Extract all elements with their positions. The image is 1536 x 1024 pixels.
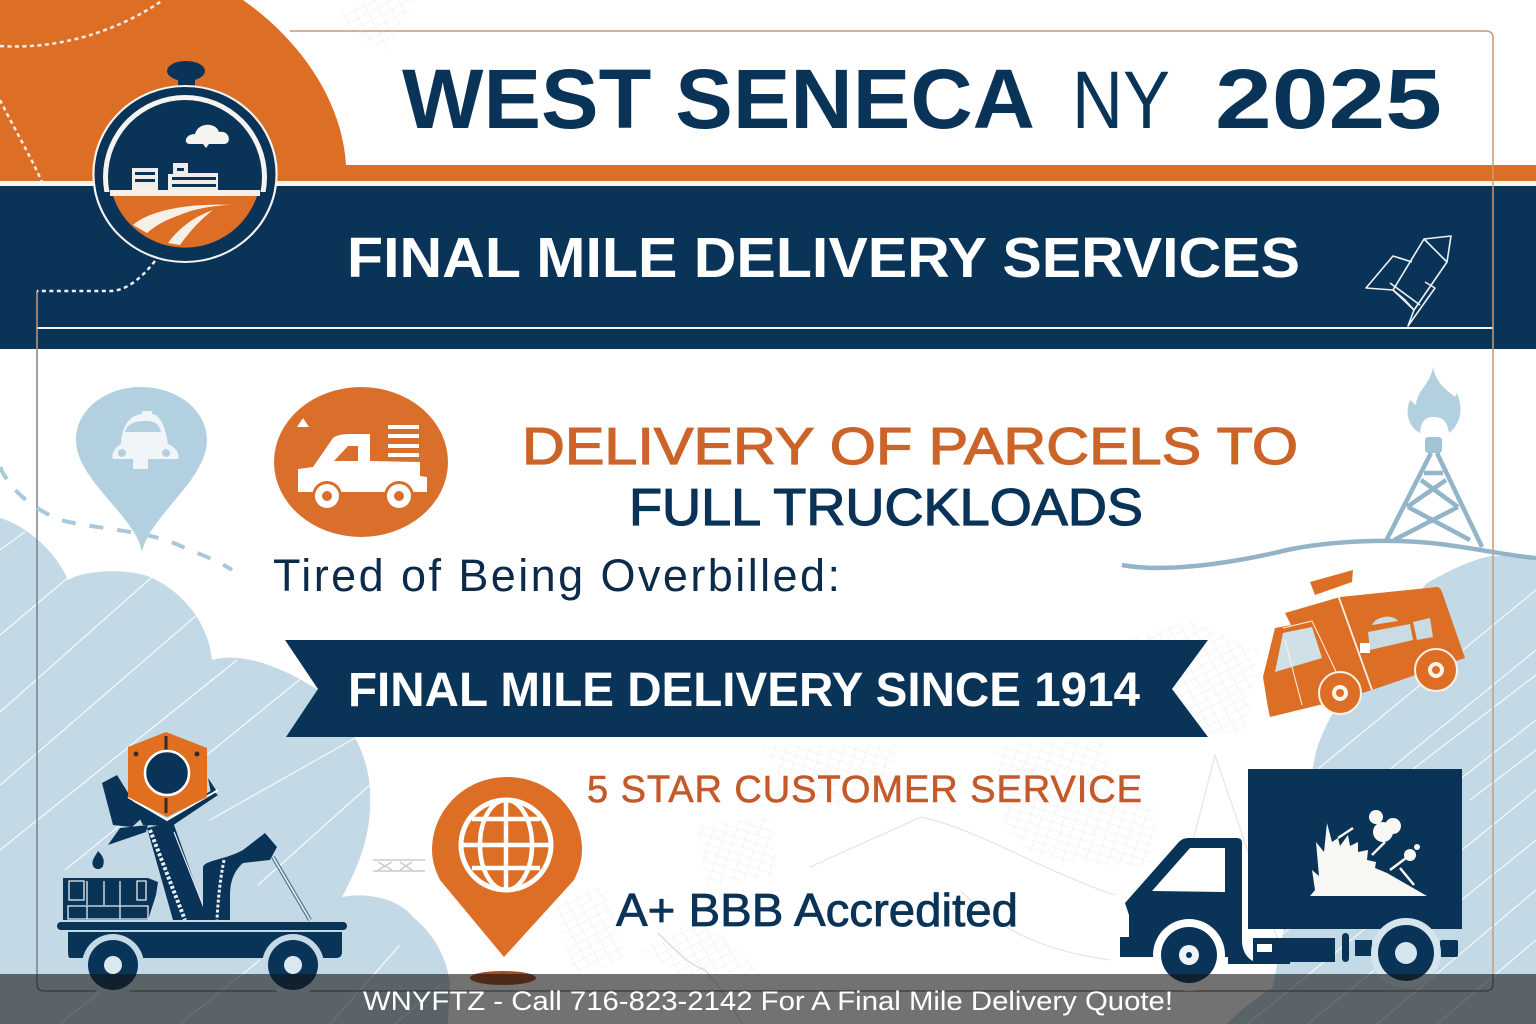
banner text: FINAL MILE DELIVERY SINCE 1914 <box>348 664 1140 717</box>
icon: orange food truck <box>1263 570 1465 717</box>
icon: flatbed truck with crane <box>57 732 347 996</box>
orange header corner <box>0 0 1536 181</box>
icon: orange globe pin <box>432 777 582 985</box>
ribbon banner <box>285 640 1208 737</box>
subtitle: FINAL MILE DELIVERY SERVICES <box>347 226 1300 290</box>
light blue cloud panels with diagonal lines <box>0 518 1536 1024</box>
icon: orange circle with pickup truck <box>274 387 448 537</box>
heading: full truckloads: FULL TRUCKLOADS <box>629 479 1143 537</box>
footer bar <box>0 974 1536 1024</box>
white rule in band <box>37 327 1493 329</box>
small map mark <box>373 860 425 871</box>
text: tired of being overbilled: Tired of Being Overbilled: <box>273 550 840 601</box>
text: A+ BBB accredited: A+ BBB Accredited <box>616 884 1018 936</box>
title: WEST SENECA <box>402 52 1035 146</box>
footer text: WNYFTZ - Call 716-823-2142 For A Final Mile Delivery Quote! <box>363 986 1173 1016</box>
title <box>402 52 1442 146</box>
faint street map background <box>340 0 1290 1024</box>
icon: stopwatch with town and road <box>92 61 278 263</box>
icon: box truck with mountain scene <box>1120 769 1462 991</box>
heading: delivery of parcels: DELIVERY OF PARCELS TO <box>522 418 1298 476</box>
icon: gas tower on hill <box>1122 367 1536 568</box>
title: NY <box>1072 55 1170 146</box>
text: five star customer service: 5 STAR CUSTOMER SERVICE <box>587 769 1142 811</box>
dotted route lines <box>0 0 163 291</box>
navy header band <box>0 186 1536 349</box>
frame dark sections <box>37 349 1493 991</box>
dashed route line <box>0 467 232 570</box>
icon: rocket outline <box>1366 236 1451 326</box>
icon: light blue location pin with taxi <box>76 387 207 552</box>
title: 2025 <box>1215 52 1442 146</box>
white rule above header band <box>0 181 1536 186</box>
